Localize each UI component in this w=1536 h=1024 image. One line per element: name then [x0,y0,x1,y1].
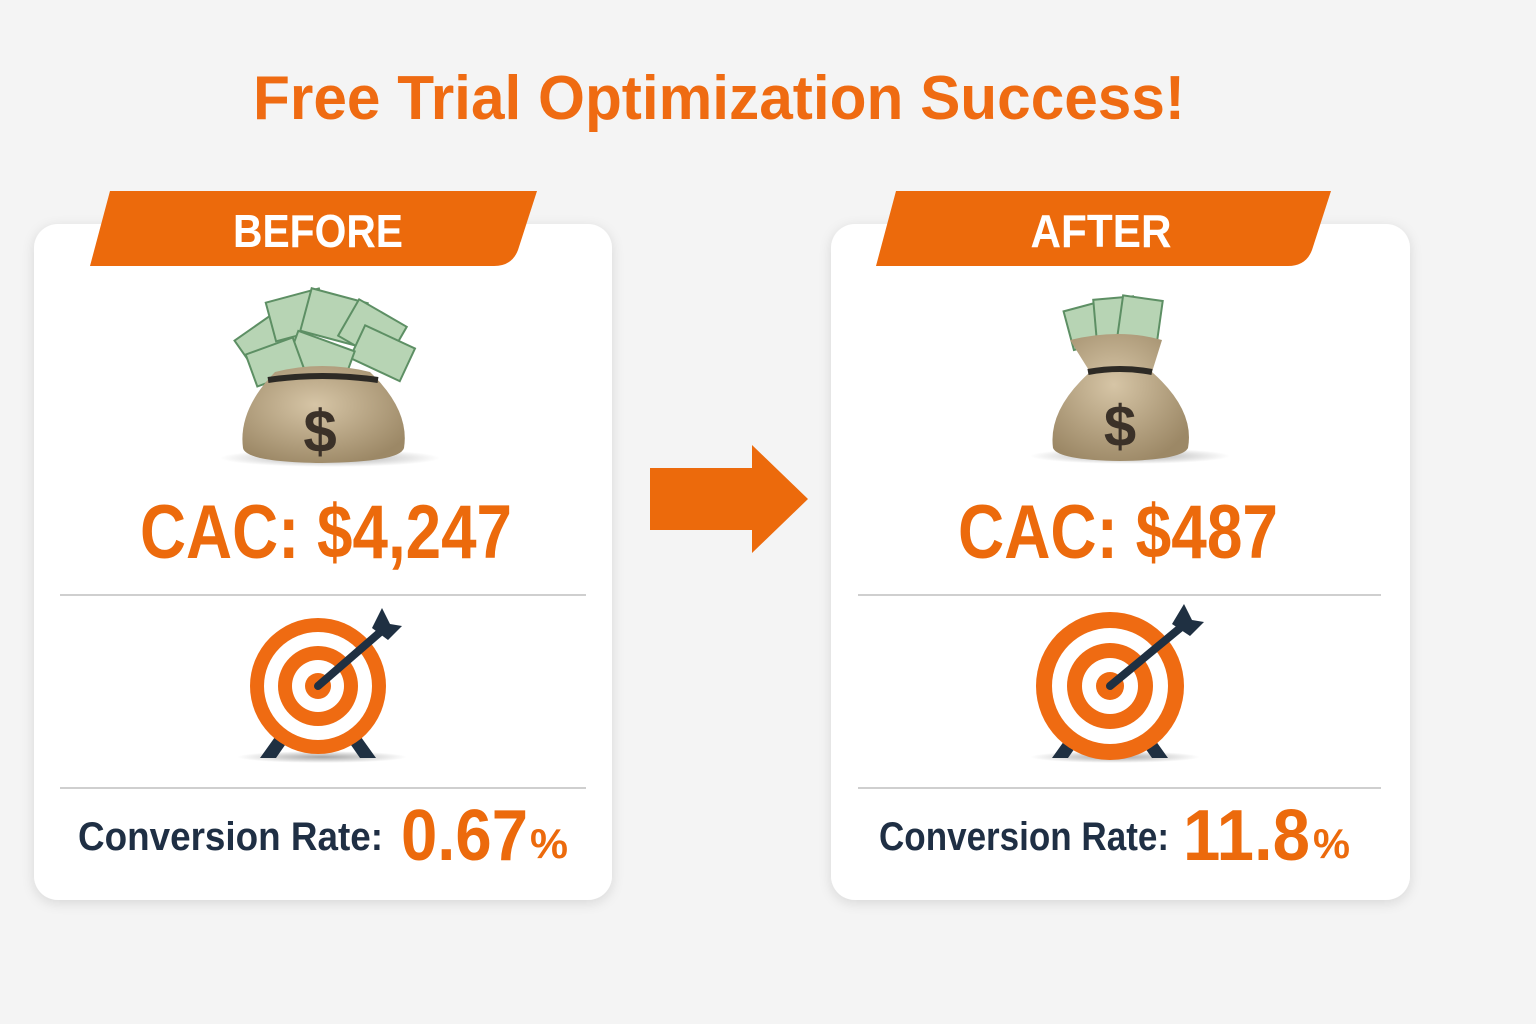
conversion rate before [78,796,568,876]
tab: after [876,191,1331,266]
title: Free Trial Optimization Success! [253,64,1185,133]
tab: after: AFTER [1030,205,1172,257]
CAC value before: CAC: $4,247 [140,490,512,575]
tab: before [90,191,537,266]
panel: before [34,191,612,900]
icon: target after [1030,604,1204,763]
conversion rate after [879,796,1350,876]
panel: after [831,191,1410,900]
icon: money bag full [220,288,440,467]
icon: money bag small: $ [1104,394,1136,459]
icon: money bag small [1030,295,1230,464]
conversion rate after: % [1313,820,1350,867]
icon: money bag full: $ [303,398,337,465]
conversion rate after: Conversion Rate: [879,815,1169,859]
tab: before: BEFORE [233,205,403,257]
conversion rate after: 11.8 [1183,796,1310,876]
CAC value after: CAC: $487 [958,490,1278,575]
arrow [650,445,808,553]
conversion rate before: % [530,820,568,867]
icon: target [237,608,407,763]
conversion rate before: 0.67 [401,796,528,876]
conversion rate before: Conversion Rate: [78,815,383,859]
